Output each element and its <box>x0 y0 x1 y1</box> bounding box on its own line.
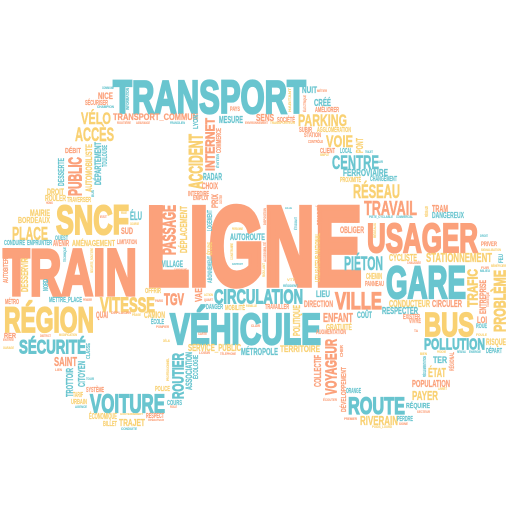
words: seat tube and lower centre: TRAJET <box>119 418 145 429</box>
words: top centre: RÉSEAU <box>353 181 400 203</box>
words: left frame tube: ROUTIÈRE <box>117 120 132 125</box>
words: bottom bracket and centre: POLITIQUE <box>292 305 303 336</box>
words: top centre: PRIX <box>210 194 220 208</box>
word: VILLE: VILLE <box>335 288 382 315</box>
words: top centre: MÉTIER <box>317 88 327 93</box>
words: top centre: STATION <box>304 133 321 139</box>
words: top centre: LYON <box>193 115 200 129</box>
words: top centre: CONTRÔLE <box>308 137 323 144</box>
words: right wheel and head tube: RÉGIONAL <box>448 352 456 371</box>
words: top centre: EMPLOI <box>193 196 208 202</box>
words: top centre: PONT <box>355 138 366 153</box>
words: top centre: AIR <box>378 159 383 164</box>
words: seat tube and lower centre: SAINT <box>54 354 77 369</box>
words: bottom bracket and centre: TERRITOIRE <box>280 344 320 354</box>
words: left frame tube: HOMO <box>46 201 53 205</box>
words: right wheel and head tube: RÉGLEMENTATION <box>420 356 427 377</box>
words: top centre: COMMERCE <box>216 128 223 153</box>
words: right wheel and head tube: FOULE <box>476 332 487 337</box>
word: TRAFIC: TRAFIC <box>464 269 482 307</box>
words: seat tube and lower centre: COURS <box>167 400 182 407</box>
word: CIRCULATION: CIRCULATION <box>214 286 303 308</box>
words: top centre: TRANSPORTEUR <box>270 121 295 125</box>
words: inside LIGNE: CONSTRUIRE <box>230 243 234 260</box>
word: BUS: BUS <box>424 306 474 343</box>
words: right wheel and head tube: LOI <box>477 315 487 325</box>
words: left frame tube: ÉLU <box>130 208 142 223</box>
words: bottom bracket and centre: ÉCOUTER <box>323 397 337 402</box>
words: right wheel and head tube: VIVRE <box>409 319 421 325</box>
words: top centre: PROXIMITÉ <box>340 175 361 184</box>
words: top centre: CHANGEMENT <box>370 176 397 183</box>
words: left frame tube: DÉBIT <box>65 146 82 155</box>
word: TRANSPORT: TRANSPORT <box>113 71 306 123</box>
words: seat tube and lower centre: MODIFICATION <box>59 332 77 337</box>
words: seat tube and lower centre: SYSTÈME <box>86 385 104 394</box>
words: bottom bracket and centre: TÉLÉPHONE <box>220 351 236 356</box>
words: inside LIGNE: VTT <box>287 278 296 282</box>
words: top centre: PISTE_CYCLABLE <box>369 215 394 219</box>
word: ACCIDENT: ACCIDENT <box>186 134 208 189</box>
words: bottom bracket and centre: DÉVELOPPEMENT <box>339 366 348 412</box>
words: bottom bracket and centre: ÉCOLOGIE <box>191 355 200 379</box>
words: inside LIGNE: LOGEMENT <box>207 210 214 231</box>
words: inside LIGNE <box>162 205 489 288</box>
words: seat tube and lower centre: BILLET <box>103 421 117 428</box>
words: right wheel and head tube: RÉSEAU <box>457 349 466 354</box>
words: seat tube and lower centre: PÉAGE <box>132 312 141 317</box>
words: right wheel and head tube: CONDUCTEUR <box>389 299 430 310</box>
words: bottom bracket and centre: COLLECTIF <box>313 355 324 387</box>
words: top centre: AMÉLIORER <box>315 105 339 114</box>
words: right wheel and head tube: ENTREPRISE <box>478 280 488 314</box>
words: top centre: LOCAL <box>340 148 352 155</box>
words: left frame tube: OUEST <box>55 236 68 242</box>
words: left frame tube: SÉCURISER <box>85 98 108 107</box>
words: seat tube and lower centre: QUAI <box>96 310 108 320</box>
word: LIGNE: LIGNE <box>146 184 362 309</box>
words: seat tube and lower centre: TOUR <box>86 376 94 381</box>
words: bottom bracket and centre: FAMILLE <box>246 303 257 308</box>
words: bottom bracket and centre: ACTION <box>204 293 213 297</box>
words: left frame tube: DÉPARTEMENT <box>93 142 103 185</box>
words: left frame tube: VÉLO <box>81 109 111 128</box>
words: seat tube and lower centre: NORD <box>43 279 50 291</box>
words: bottom bracket and centre: DANGER <box>206 304 223 311</box>
words: top centre: RADAR <box>203 172 222 183</box>
words: inside LIGNE: VILLAGE <box>162 259 183 269</box>
words: seat tube and lower centre: URBAIN <box>71 399 87 406</box>
words: left frame tube: MAIRIE <box>30 208 50 218</box>
words: top centre: SUBIR <box>299 127 312 134</box>
words: top centre: TRAJET <box>365 149 373 154</box>
words: bottom bracket and centre: MOBILITÉ <box>225 303 245 312</box>
words: left frame tube: AUTOMOBILISTE <box>84 144 94 192</box>
words: top centre: SOCIÉTÉ <box>277 115 295 124</box>
words: seat tube and lower centre: DISTRICT <box>40 333 51 338</box>
words: left frame tube: NICE <box>98 91 113 101</box>
words: top centre: SENS <box>256 113 274 124</box>
words: bottom bracket and centre: MÉTROPOLE <box>241 345 278 358</box>
words: seat tube and lower centre: EMPRUNTER <box>27 240 52 247</box>
words: top centre: TRAM <box>432 204 448 215</box>
words: top centre: PAYS <box>230 107 240 113</box>
words: top centre: CRÉÉ <box>314 96 331 109</box>
words: left frame tube: COURSE <box>130 221 139 226</box>
words: left frame tube: INFORMATION <box>125 88 130 110</box>
words: bottom bracket and centre: SERVICE_PUBLIC <box>188 343 241 354</box>
words: seat tube and lower centre: GARAGE <box>3 346 14 350</box>
words: top centre: INTERDIRE <box>188 191 209 198</box>
words: seat tube and lower centre: CITOYEN <box>77 361 88 387</box>
words: inside LIGNE: UTILISATEUR NATIONAL <box>315 233 322 282</box>
words: top centre: SIMPLE <box>320 152 329 157</box>
words: top centre: DANGEREUX <box>432 211 464 220</box>
words: seat tube and lower centre: RESPECT <box>146 413 164 420</box>
word: ROUTIER: ROUTIER <box>170 353 188 399</box>
words: seat tube and lower centre: TECHNIQUE <box>62 247 67 262</box>
words: right wheel and head tube: TA <box>414 329 418 333</box>
words: seat tube and lower centre: AUTOBITER <box>3 258 10 283</box>
words: right wheel and head tube: ROUE <box>476 324 487 330</box>
words: right wheel and head tube: PAYER <box>412 388 438 403</box>
words: seat tube and lower centre: TROTTOIR <box>65 368 76 397</box>
words: seat tube and lower centre: CLASSE <box>86 342 92 359</box>
words: seat tube and lower centre: MÉTRO <box>5 297 19 306</box>
words: right wheel and head tube: PANNEAU <box>365 281 384 288</box>
words: bottom bracket and centre <box>164 288 372 412</box>
words: top centre: VOIE <box>326 132 353 151</box>
words: seat tube and lower centre: CONDUITE <box>121 426 137 431</box>
words: left frame tube: ACCÈS <box>75 124 114 146</box>
words: top centre: RÉSEAUX <box>422 206 429 217</box>
words: right wheel and head tube: TER <box>433 355 447 365</box>
words: bottom bracket and centre: CLAIR <box>251 324 260 328</box>
words: seat tube and lower centre: PROFESSIONNEL <box>165 358 170 381</box>
words: left frame tube: CHAMPION <box>97 104 114 109</box>
words: bottom bracket and centre: ASSOCIATION <box>184 352 194 390</box>
words: left frame tube: DESSERTE <box>57 158 66 186</box>
words: inside LIGNE: ÉTUDE <box>206 242 214 255</box>
word: PROBLÈME: PROBLÈME <box>490 270 510 332</box>
words: right wheel and head tube: RIVERAIN <box>360 413 398 428</box>
words: seat tube and lower centre: PENSER <box>83 297 92 302</box>
words: bottom bracket and centre: TGV <box>164 290 184 309</box>
words: seat tube and lower centre: ROLE <box>170 405 177 409</box>
words: seat tube and lower centre: ÉCONOMIQUE <box>89 412 117 421</box>
words: seat tube and lower centre: METTRE_PLACE <box>49 297 82 304</box>
words: seat tube and lower centre: SECURITE_ROUTIERE <box>90 248 94 273</box>
words: right wheel and head tube: CHEMIN <box>366 272 382 281</box>
words: bottom bracket and centre: LOISIR <box>199 350 210 355</box>
words: right wheel and head tube: PROCHE <box>437 350 446 354</box>
words: seat tube and lower centre: POLICE <box>155 386 170 393</box>
words: top centre: MESURE <box>219 115 243 126</box>
word: TRAIN: TRAIN <box>3 235 137 309</box>
words: seat tube and lower centre: AGENCE <box>75 405 88 409</box>
words: right wheel and head tube: PERDRE <box>397 416 413 423</box>
words: right wheel and head tube: POPULATION <box>412 379 450 390</box>
words: seat tube and lower centre: AMÉNAGEMENT <box>72 239 115 248</box>
words: seat tube and lower centre: LIMITATION <box>117 240 137 246</box>
words: right wheel and head tube: RÉQUIRE <box>406 401 430 410</box>
words: right wheel and head tube: ARRÊT <box>438 386 448 391</box>
words: bottom bracket and centre: AUGMENTATION <box>316 330 346 336</box>
words: inside LIGNE: DROIT <box>480 234 489 238</box>
words: left frame tube: RUE <box>121 210 127 215</box>
words: inside LIGNE: DÉPLACEMENT <box>177 206 190 253</box>
words: seat tube and lower centre: RER <box>4 333 16 340</box>
word: PASSAGE: PASSAGE <box>160 205 180 255</box>
words: seat tube and lower centre: DÉPLACER <box>111 310 131 315</box>
words: seat tube and lower centre: LIEN <box>55 368 62 372</box>
words: bottom bracket and centre: DIRECTION <box>304 299 333 309</box>
word: VOYAGEUR: VOYAGEUR <box>324 339 340 395</box>
words: right wheel and head tube: SIGNALISATION <box>481 247 501 252</box>
words: left frame tube: TRANSPORT_COMMUN <box>113 112 198 122</box>
words: left frame tube: COMMUNE <box>102 85 114 90</box>
word: VITESSE: VITESSE <box>100 294 155 317</box>
word: SNCF: SNCF <box>56 197 129 243</box>
words: right wheel and head tube: POIDS_LOURD <box>372 425 392 429</box>
word: ROUTE: ROUTE <box>348 393 405 420</box>
words: inside LIGNE: PRIORITÉ <box>315 205 324 225</box>
words: seat tube and lower centre: POMPIER <box>156 324 169 329</box>
words: top centre <box>188 85 464 220</box>
words: left frame tube: ROULER <box>45 194 66 203</box>
words: left frame tube: BORDEAUX <box>18 216 50 225</box>
words: right wheel and head tube: PREMIER <box>344 416 357 421</box>
words: right wheel and head tube: MILIEU <box>480 269 490 273</box>
words: right wheel and head tube: EXISTER <box>403 314 420 321</box>
words: top centre: ÉVITER <box>215 154 220 168</box>
words: bottom bracket and centre: QUART <box>204 298 214 302</box>
words: inside LIGNE: RÉSIDENT <box>283 283 299 288</box>
words: seat tube and lower centre: CONDUIRE <box>4 240 25 247</box>
words: seat tube and lower centre: DÉLAI <box>163 338 170 343</box>
words: bottom bracket and centre: ORANGE <box>346 388 361 395</box>
words: inside LIGNE: RÉSEAUX <box>372 223 377 238</box>
words: inside LIGNE: ROULANT <box>262 262 266 277</box>
words: inside LIGNE: LILLE <box>285 206 292 210</box>
words: seat tube and lower centre: GOUVERNEMENT <box>120 412 143 416</box>
words: left frame tube: DROIT <box>47 187 64 197</box>
words: seat tube and lower centre: OFFRIR <box>145 288 161 295</box>
word: INTERNET: INTERNET <box>202 118 218 171</box>
words: bottom bracket and centre: CARTE <box>198 331 207 336</box>
words: inside LIGNE: ÉTUDIANT <box>293 216 298 230</box>
words: right wheel and head tube: TOURISTIQUE <box>486 292 490 307</box>
words: top centre: NUIT <box>302 85 317 95</box>
words: right wheel and head tube: ÉTAT <box>428 365 446 380</box>
words: left frame tube: FRANCILIEN <box>170 121 185 125</box>
words: seat tube and lower centre: DESSERVIR <box>20 258 31 292</box>
words: right wheel and head tube: PIÉTON <box>344 253 383 275</box>
words: bottom bracket and centre: CHER <box>339 344 344 357</box>
words: right wheel and head tube: ÉNERGIE <box>469 349 481 354</box>
word: VÉHICULE: VÉHICULE <box>170 304 321 354</box>
word: PUBLIC: PUBLIC <box>66 157 86 196</box>
words: top centre: COMMERCIAL <box>396 215 414 219</box>
words: left frame tube: BUS <box>90 190 95 197</box>
words: bottom bracket and centre: TRAVAILLER <box>265 304 289 311</box>
words: right wheel and head tube: CYCLISTE <box>389 253 417 264</box>
words: right wheel and head tube: FUIR <box>481 266 489 270</box>
words: top centre: ÉLECTRIQUE <box>302 95 307 112</box>
words: left frame tube: TRAVERSER <box>67 197 91 204</box>
words: inside LIGNE: RAPPORT <box>232 262 243 266</box>
words: seat tube and lower centre: CAMION <box>144 310 165 320</box>
words: left frame tube: TOULOUSE <box>102 145 109 167</box>
word: RÉGION: RÉGION <box>4 300 94 340</box>
words: top centre: CLIENT <box>320 148 335 155</box>
words: left frame tube: ASSURANCE <box>136 121 150 125</box>
words: inside LIGNE: DISPOSITION <box>262 208 267 225</box>
words: inside LIGNE: CAMPAGNE <box>174 267 187 272</box>
words: inside LIGNE: OBLIGER <box>340 225 364 235</box>
words: seat tube and lower centre: PARIS <box>155 298 163 303</box>
words: top centre: CENTRE <box>332 153 379 174</box>
words: right wheel and head tube: CHAUSSÉE <box>407 260 421 265</box>
words: top centre: FERROVIAIRE <box>343 168 388 179</box>
words: bottom bracket and centre: COÛT <box>357 309 372 320</box>
words: left frame tube: EST <box>100 215 108 219</box>
words: inside LIGNE: ABONNEMENT <box>208 256 214 283</box>
words: bottom bracket and centre: ENFANT <box>323 310 353 325</box>
words: right wheel and head tube: SECTEUR <box>417 409 430 414</box>
words: left frame tube: PLACE <box>12 224 48 244</box>
words: top centre: CHOIX <box>202 181 218 191</box>
words: inside LIGNE: PERSONNE <box>232 227 243 231</box>
words: seat tube and lower centre: ÉCOLE <box>151 317 164 326</box>
words: bottom bracket and centre: GRATUITÉ <box>326 323 352 332</box>
words: top centre: ENVIRONNEMENT <box>245 121 269 125</box>
words: top centre: PARKING <box>298 111 347 130</box>
words: seat tube and lower centre: OPÉRATEUR <box>148 417 165 422</box>
words: seat tube and lower centre: ENTRÉE <box>3 337 15 342</box>
words: right wheel and head tube: CIRCULER <box>432 299 462 310</box>
word: SÉCURITÉ: SÉCURITÉ <box>19 336 86 358</box>
words: bottom bracket and centre: VAE <box>194 288 205 302</box>
word: VOITURE: VOITURE <box>90 388 165 418</box>
words: top centre: TRAVAIL <box>364 198 417 220</box>
words: top centre: AGGLOMÉRATION <box>317 125 351 134</box>
words: seat tube and lower centre: AVENIR <box>53 239 69 248</box>
words: top centre: COÛTER <box>218 195 223 204</box>
words: left frame tube <box>12 85 198 244</box>
words: right wheel and head tube <box>344 242 506 429</box>
words: right wheel and head tube: SIGNE <box>399 422 409 426</box>
words: seat tube and lower centre <box>3 239 182 431</box>
words: right wheel and head tube: BIEN <box>420 352 427 356</box>
words: left frame tube: SUD <box>121 226 133 236</box>
words: inside LIGNE: AUTOROUTE <box>230 232 265 242</box>
words: top centre: HABITANT <box>287 87 292 112</box>
words: inside LIGNE: ACCESSIBILITÉ <box>262 242 267 262</box>
words: inside LIGNE: HORAIRE <box>344 220 359 224</box>
words: right wheel and head tube: FEU <box>499 254 505 263</box>
words: right wheel and head tube: RESPECTER <box>382 306 418 317</box>
words: right wheel and head tube: PRIVER <box>481 242 497 248</box>
words: seat tube and lower centre: TARIF <box>73 392 83 399</box>
words: bottom bracket and centre: LIEU <box>316 289 330 299</box>
